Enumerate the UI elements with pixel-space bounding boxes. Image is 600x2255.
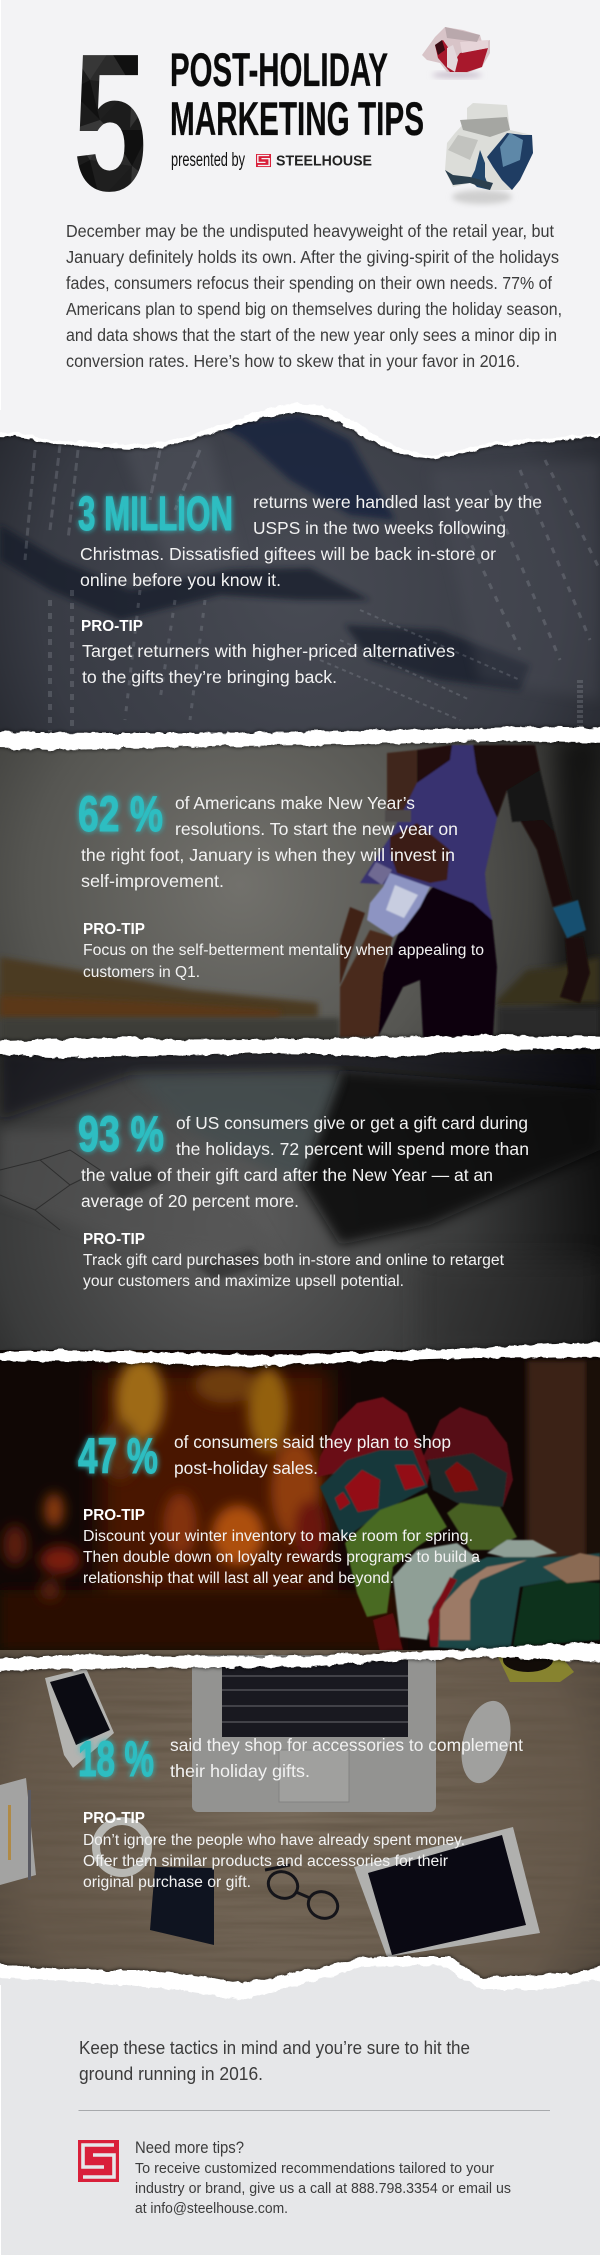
intro paragraph: December may be the undisputed heavyweight of the retail year, but [66,221,554,241]
pro-tip: relationship that will last all year and beyond. [83,1570,394,1587]
stat description [174,1432,451,1478]
torn paper edge: between tips 1 and 2 [0,727,600,750]
stat description: USPS in the two weeks following [253,518,506,538]
stat description: of US consumers give or get a gift card during [176,1113,528,1133]
stat description [81,793,458,891]
pro-tip [83,1231,505,1290]
torn paper edge: between tips 3 and 4 [0,1342,600,1367]
pro-tip: Discount your winter inventory to make room for spring. [83,1528,473,1545]
pro-tip [83,1507,480,1587]
pro-tip: Focus on the self-betterment mentality when appealing to [83,942,484,959]
presented by SteelHouse: presented by [171,150,245,171]
stat description: of consumers said they plan to shop [174,1432,451,1452]
presented by SteelHouse: STEELHOUSE [276,152,372,170]
stat description: said they shop for accessories to complement [170,1735,523,1755]
stat description [81,1113,529,1211]
panel: tip 1, 3 million returns [0,400,600,745]
runner figure [340,745,590,1037]
intro paragraph: Americans plan to spend big on themselves during the holiday season, [66,299,562,319]
illustration: crumpled red paper ball [422,27,490,78]
stat: 62 percent: 62 % [78,786,163,842]
socks [317,1397,600,1653]
contact text: industry or brand, give us a call at 888.798.3354 or email us [135,2180,511,2197]
intro paragraph [66,221,562,371]
background photo: credit card [0,1045,600,1360]
intro paragraph: fades, consumers refocus their spending on their own needs. 77% of [66,273,552,293]
presented by SteelHouse [171,150,372,171]
pro-tip: PRO-TIP [81,618,143,635]
contact text [135,2139,511,2217]
torn paper edge: between tips 2 and 3 [0,1035,600,1058]
contact text: To receive customized recommendations tailored to your [135,2160,494,2177]
contact text: at info@steelhouse.com. [135,2200,288,2217]
pro-tip: Target returners with higher-priced alternatives [82,641,455,661]
pro-tip: Offer them similar products and accessories for their [83,1853,448,1870]
panel: tip 4, 47 percent post-holiday sales [0,1350,600,1665]
pro-tip: original purchase or gift. [83,1874,251,1891]
background photo: fireplace and socks [0,1350,600,1665]
stat: 18 percent: 18 % [78,1731,154,1787]
stat description: the right foot, January is when they will invest in [81,845,455,865]
stat description: online before you know it. [80,570,281,590]
contact text: Need more tips? [135,2139,244,2157]
intro paragraph: and data shows that the start of the new year only sees a minor dip in [66,325,557,345]
header: large number 5: 5 [73,13,147,232]
pro-tip [83,1810,465,1891]
background photo: desk with devices [0,1648,600,1990]
intro paragraph: January definitely holds its own. After the giving-spirit of the holidays [66,247,559,267]
closing statement [79,2037,470,2084]
torn paper edge: below intro [0,0,600,459]
pro-tip: PRO-TIP [83,1231,145,1248]
pro-tip: PRO-TIP [83,1810,145,1827]
footer background [0,2005,600,2255]
pro-tip [81,618,455,687]
stat description: self-improvement. [81,871,224,891]
stat description: of Americans make New Year’s [175,793,415,813]
stat description: the value of their gift card after the New Year — at an [81,1165,493,1185]
stat: 47 percent: 47 % [78,1428,158,1484]
stat description: Christmas. Dissatisfied giftees will be back in-store or [80,544,496,564]
background photo: receipts [0,400,600,745]
stat description: the holidays. 72 percent will spend more than [176,1139,529,1159]
stat description: average of 20 percent more. [81,1191,299,1211]
pro-tip: PRO-TIP [83,921,145,938]
stat: 3 million: 3 MILLION [78,488,233,541]
pro-tip: your customers and maximize upsell potential. [83,1273,404,1290]
torn paper edge: above footer [0,1957,600,2030]
torn paper edge: between tips 4 and 5 [0,1642,600,1672]
closing statement: Keep these tactics in mind and you’re sure to hit the [79,2037,470,2058]
pro-tip: customers in Q1. [83,964,200,981]
stat description [170,1735,523,1781]
pro-tip: Track gift card purchases both in-store and online to retarget [83,1252,505,1269]
pro-tip: PRO-TIP [83,1507,145,1524]
closing statement: ground running in 2016. [79,2063,263,2084]
pro-tip: to the gifts they’re bringing back. [82,667,337,687]
panel: tip 3, 93 percent gift cards [0,1045,600,1360]
pro-tip [83,921,484,981]
panel: tip 2, 62 percent resolutions [0,735,600,1050]
title: POST-HOLIDAY [170,43,388,96]
intro paragraph: conversion rates. Here’s how to skew that in your favor in 2016. [66,351,520,371]
stat: 93 percent: 93 % [78,1106,164,1162]
background photo: runner stretching [0,735,600,1050]
stat description: post-holiday sales. [174,1458,318,1478]
panel: tip 5, 18 percent accessories [0,1648,600,1990]
title [170,43,424,145]
icon: SteelHouse logo [78,2140,119,2182]
stat description [80,492,542,590]
pro-tip: Then double down on loyalty rewards programs to build a [83,1549,480,1566]
stat description: their holiday gifts. [170,1761,310,1781]
icon: SteelHouse logo small [256,154,271,167]
pro-tip: Don’t ignore the people who have already spent money. [83,1832,465,1849]
stat description: returns were handled last year by the [253,492,542,512]
illustration: crumpled blue paper ball [445,103,533,204]
stat description: resolutions. To start the new year on [175,819,458,839]
title: MARKETING TIPS [170,92,424,145]
